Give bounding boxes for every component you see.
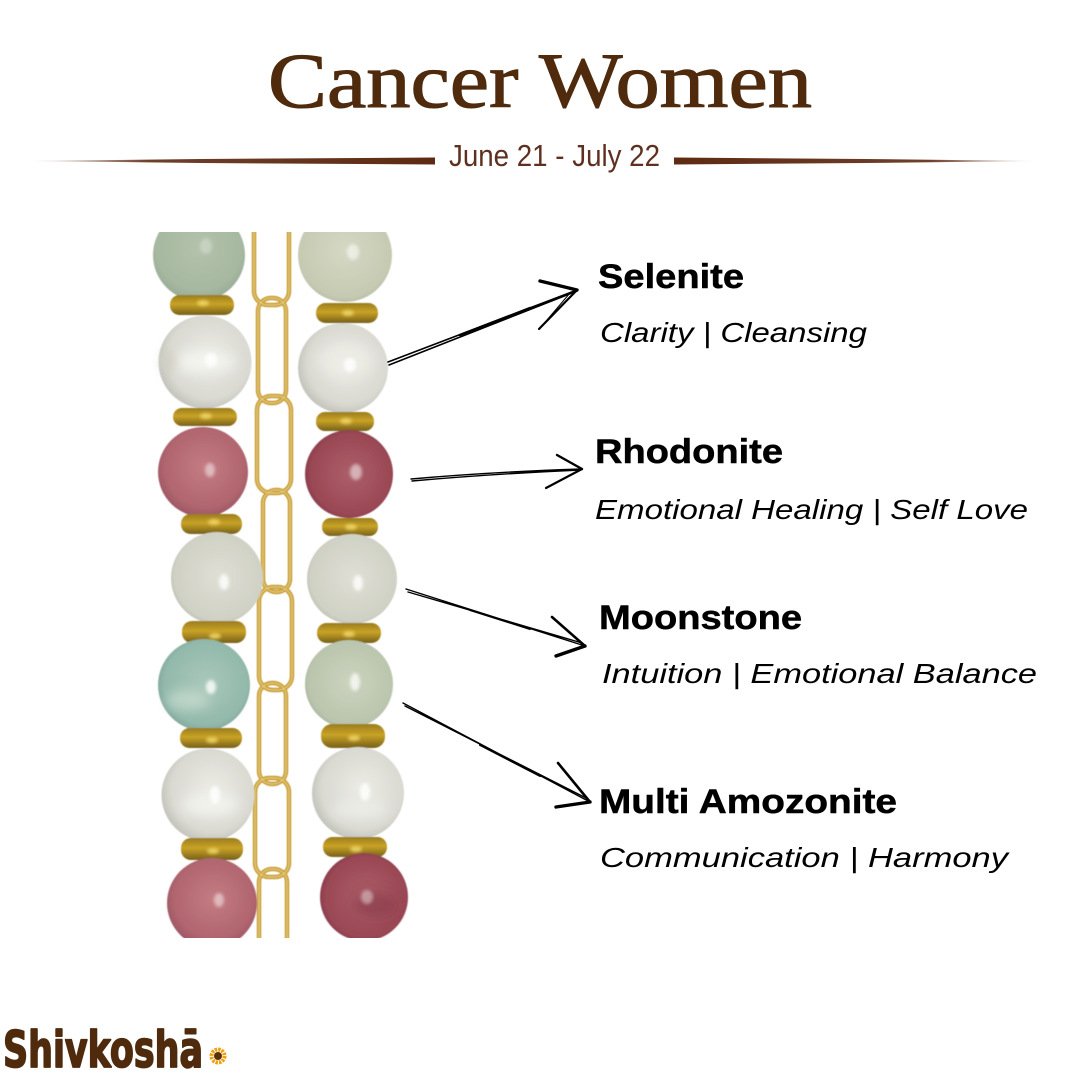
label: moonstone [599, 599, 1037, 689]
left strand [153, 209, 263, 948]
multi amozonite name: Multi Amozonite [599, 783, 897, 821]
label: rhodonite [595, 433, 1028, 525]
label: selenite [598, 258, 867, 348]
logo [3, 1021, 224, 1079]
bead colour patches [160, 342, 397, 917]
date subtitle with divider [25, 138, 1040, 173]
label: multi amozonite [599, 783, 1010, 873]
bracelet photo: beads and chain [153, 190, 408, 969]
chain [254, 190, 292, 969]
arrow: multi amozonite [403, 703, 590, 807]
rhodonite properties: Emotional Healing | Self Love [595, 494, 1028, 525]
right strand [298, 208, 408, 941]
arrow: rhodonite [411, 455, 582, 488]
brand wordmark: Shivkoshā [3, 1021, 203, 1079]
icon: sunflower [212, 1050, 224, 1062]
selenite name: Selenite [598, 258, 744, 296]
title: Cancer Women [268, 37, 812, 124]
multi amozonite properties: Communication | Harmony [600, 842, 1010, 873]
bead highlights [200, 238, 373, 907]
spacer highlights [197, 300, 362, 854]
arrow: moonstone [406, 589, 585, 656]
moonstone name: Moonstone [599, 599, 802, 637]
selenite properties: Clarity | Cleansing [600, 317, 867, 348]
date range: June 21 - July 22 [449, 138, 660, 173]
rhodonite name: Rhodonite [595, 433, 783, 471]
moonstone properties: Intuition | Emotional Balance [602, 658, 1037, 689]
arrow: selenite [388, 281, 577, 365]
